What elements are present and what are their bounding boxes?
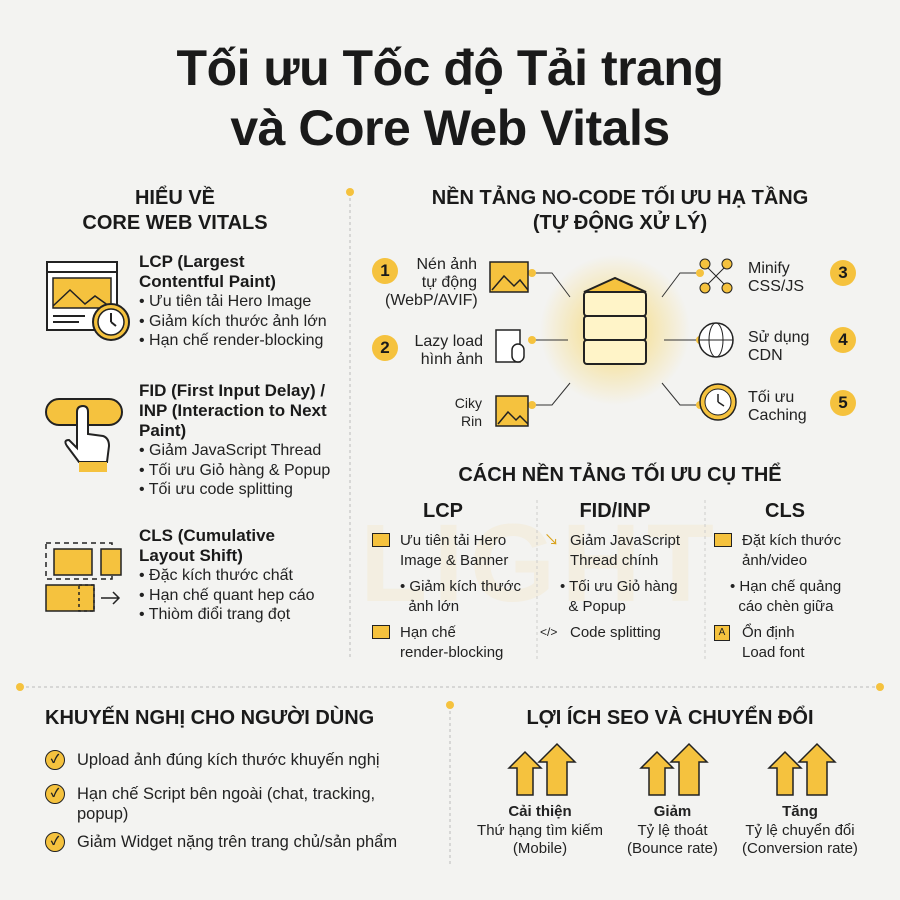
text: FID/INP: FID (First Input Delay) / — [139, 381, 325, 400]
column: FID/INP — [540, 500, 680, 641]
heading: hiểu về: HIỂU VỀ — [135, 187, 215, 209]
text: LCP: Contentful Paint) — [139, 272, 276, 291]
node 1 — [372, 258, 398, 284]
benefit 1: Thứ hạng tìm kiếm — [477, 822, 603, 838]
text: LCP: • Hạn chế render-blocking — [139, 332, 323, 349]
panel: no-code platform: Lazy load — [414, 333, 483, 350]
heading: LỢI ÍCH SEO VÀ CHUYỂN ĐỔI — [526, 707, 814, 729]
column: LCP — [372, 500, 521, 660]
panel: no-code platform: 4 — [838, 330, 848, 349]
watermark: LIGHT — [360, 502, 720, 625]
node 6: Ciky — [455, 395, 482, 411]
column: CLS: A — [719, 627, 725, 638]
node 6: Rin — [461, 413, 482, 429]
node 1: 1 — [380, 261, 390, 280]
benefit 2 — [627, 803, 718, 857]
benefit 2: Tỷ lệ thoát — [637, 822, 708, 838]
column: FID/INP: FID/INP — [579, 500, 651, 522]
panel: specific optimizations — [372, 462, 841, 660]
text: FID/INP: Paint) — [139, 421, 186, 440]
diagram: server hub — [489, 258, 737, 427]
column: CLS: Ổn định — [742, 624, 795, 641]
column: CLS: Load font — [742, 644, 805, 660]
title — [177, 40, 723, 156]
column: FID/INP: ↘ — [544, 532, 559, 549]
item 1: Upload ảnh đúng kích thước khuyến nghị — [77, 751, 380, 769]
heading: CÁCH NỀN TẢNG TỐI ƯU CỤ THỂ — [458, 464, 782, 486]
node 4 — [748, 329, 809, 364]
item 3: ✓ — [51, 834, 59, 848]
text: LCP: • Giảm kích thước ảnh lớn — [139, 312, 327, 330]
icon: LCP browser with stopwatch — [46, 261, 130, 341]
node 2: 2 — [380, 338, 390, 357]
node 6 — [455, 395, 482, 429]
benefit 3: (Conversion rate) — [742, 840, 858, 857]
text: CLS: • Hạn chế quant hep cáo — [139, 586, 315, 604]
column: LCP: render-blocking — [400, 644, 503, 660]
item 2: popup) — [77, 805, 128, 823]
panel: no-code platform: hình ảnh — [421, 351, 483, 368]
heading: (TỰ ĐỘNG XỬ LÝ) — [533, 212, 707, 234]
benefit 3 — [742, 803, 858, 857]
benefit 2: Giảm — [654, 803, 691, 820]
icon: CLS layout shift — [45, 542, 122, 612]
column: LCP: Ưu tiên tải Hero — [400, 532, 506, 549]
column: FID/INP: • Tối ưu Giỏ hàng — [560, 578, 678, 595]
column: FID/INP: & Popup — [568, 598, 626, 614]
heading: hiểu về — [82, 186, 268, 234]
item 1: ✓ — [51, 752, 59, 766]
node 4: Sử dụng — [748, 329, 809, 346]
benefit 3: Tỷ lệ chuyển đổi — [745, 822, 855, 838]
heading: hiểu về: CORE WEB VITALS — [82, 212, 268, 234]
node 5: Tối ưu — [748, 389, 794, 406]
icons right — [699, 323, 733, 357]
item 3: Giảm Widget nặng trên trang chủ/sản phẩm — [77, 833, 397, 851]
text: LCP: • Ưu tiên tải Hero Image — [139, 293, 311, 310]
text: LCP: LCP (Largest — [139, 252, 244, 271]
column: CLS: cáo chèn giữa — [738, 598, 833, 614]
column: LCP: ảnh lớn — [408, 598, 459, 614]
icons left — [490, 262, 528, 292]
column: LCP: LCP — [423, 500, 463, 522]
panel: no-code platform: 5 — [838, 393, 848, 412]
title: Tối ưu Tốc độ Tải trang — [177, 40, 723, 96]
column: LCP: • Giảm kích thước — [400, 578, 521, 595]
text: LCP — [139, 252, 327, 349]
item 2 — [45, 784, 375, 823]
benefit 3: Tăng — [782, 803, 818, 820]
column: FID/INP: Code splitting — [570, 624, 661, 641]
column: LCP: Hạn chế — [400, 624, 456, 641]
column: FID/INP: Giảm JavaScript — [570, 532, 680, 549]
node 3 — [748, 260, 804, 295]
text: FID/INP: • Tối ưu Giỏ hàng & Popup — [139, 462, 330, 478]
panel: no-code platform: (WebP/AVIF) — [385, 292, 478, 309]
text: CLS: Layout Shift) — [139, 546, 243, 565]
text: FID/INP: • Tối ưu code splitting — [139, 481, 293, 498]
panel: SEO benefits — [477, 706, 858, 857]
heading: KHUYẾN NGHỊ CHO NGƯỜI DÙNG — [45, 707, 374, 729]
text: CLS: • Thiòm điổi trang đọt — [139, 606, 290, 623]
node 5: Caching — [748, 407, 807, 424]
text: CLS: CLS (Cumulative — [139, 526, 275, 545]
node 3: Minify — [748, 260, 790, 277]
benefit 1 — [477, 803, 603, 857]
node 5 — [748, 389, 807, 424]
panel: no-code platform — [372, 186, 856, 429]
panel: no-code platform: 3 — [838, 263, 848, 282]
text: FID/INP — [139, 381, 330, 498]
text: CLS — [139, 526, 315, 623]
column: CLS: CLS — [765, 500, 805, 522]
heading — [432, 186, 808, 234]
panel: no-code platform: tự động — [422, 274, 477, 291]
text: FID/INP: INP (Interaction to Next — [139, 401, 327, 420]
column: CLS — [714, 500, 841, 660]
panel: no-code platform: Nén ảnh — [416, 256, 477, 273]
item 2: Hạn chế Script bên ngoài (chat, tracking, — [77, 785, 375, 803]
column: CLS: Đặt kích thước — [742, 532, 841, 549]
node 2 — [372, 335, 398, 361]
text: CLS: • Đặc kích thước chất — [139, 567, 293, 584]
column: FID/INP: </> — [540, 625, 557, 639]
arrows — [507, 743, 837, 796]
column: LCP: Image & Banner — [400, 552, 508, 568]
icon: FID hand click — [45, 398, 123, 472]
column: FID/INP: Thread chính — [570, 552, 658, 568]
heading: NỀN TẢNG NO-CODE TỐI ƯU HẠ TẦNG — [432, 187, 808, 209]
title: và Core Web Vitals — [230, 100, 670, 156]
panel: core web vitals — [45, 186, 330, 623]
item 2: ✓ — [51, 786, 59, 800]
benefit 2: (Bounce rate) — [627, 840, 718, 857]
text: FID/INP: • Giảm JavaScript Thread — [139, 442, 321, 459]
node 4: CDN — [748, 347, 783, 364]
panel: recommendations — [45, 706, 397, 852]
column: CLS: ảnh/video — [742, 552, 807, 568]
benefit 1: Cải thiện — [508, 803, 572, 820]
node 3: CSS/JS — [748, 278, 804, 295]
benefit 1: (Mobile) — [513, 840, 567, 857]
column: CLS: • Hạn chế quảng — [730, 578, 841, 595]
